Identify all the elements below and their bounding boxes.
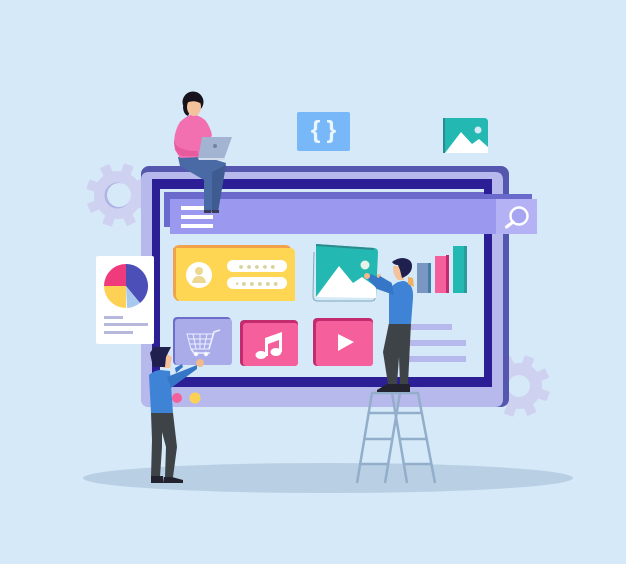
man with cart xyxy=(149,347,204,483)
monitor xyxy=(141,166,509,407)
icon: play xyxy=(338,334,354,351)
icon: cart xyxy=(187,330,220,356)
woman with laptop xyxy=(174,92,232,213)
icon: music note xyxy=(256,332,282,359)
bar chart xyxy=(417,246,467,293)
icon: right gear xyxy=(479,346,559,426)
code icon card xyxy=(297,112,350,151)
status dots xyxy=(172,392,200,404)
music card xyxy=(240,320,298,366)
avatar xyxy=(186,262,212,288)
legend lines xyxy=(104,316,148,334)
image card xyxy=(313,244,378,301)
password field: ▪ ● ● ● ● ● xyxy=(236,278,278,288)
text lines xyxy=(408,324,466,362)
ladder xyxy=(357,393,435,483)
pie chart card xyxy=(96,256,154,344)
header bar xyxy=(164,192,537,234)
laptop xyxy=(198,137,232,160)
ground shadow xyxy=(83,463,573,493)
pie chart xyxy=(104,264,148,308)
search button xyxy=(496,199,537,234)
cart card xyxy=(173,317,232,365)
icon: left gear xyxy=(77,154,159,236)
yellow profile card xyxy=(173,245,295,301)
video card xyxy=(313,318,373,366)
menu icon xyxy=(181,206,213,228)
man on ladder xyxy=(364,258,414,392)
image icon xyxy=(443,118,488,153)
username field: ● ● ● ● ● xyxy=(238,262,276,272)
code icon card: { } xyxy=(311,116,336,144)
